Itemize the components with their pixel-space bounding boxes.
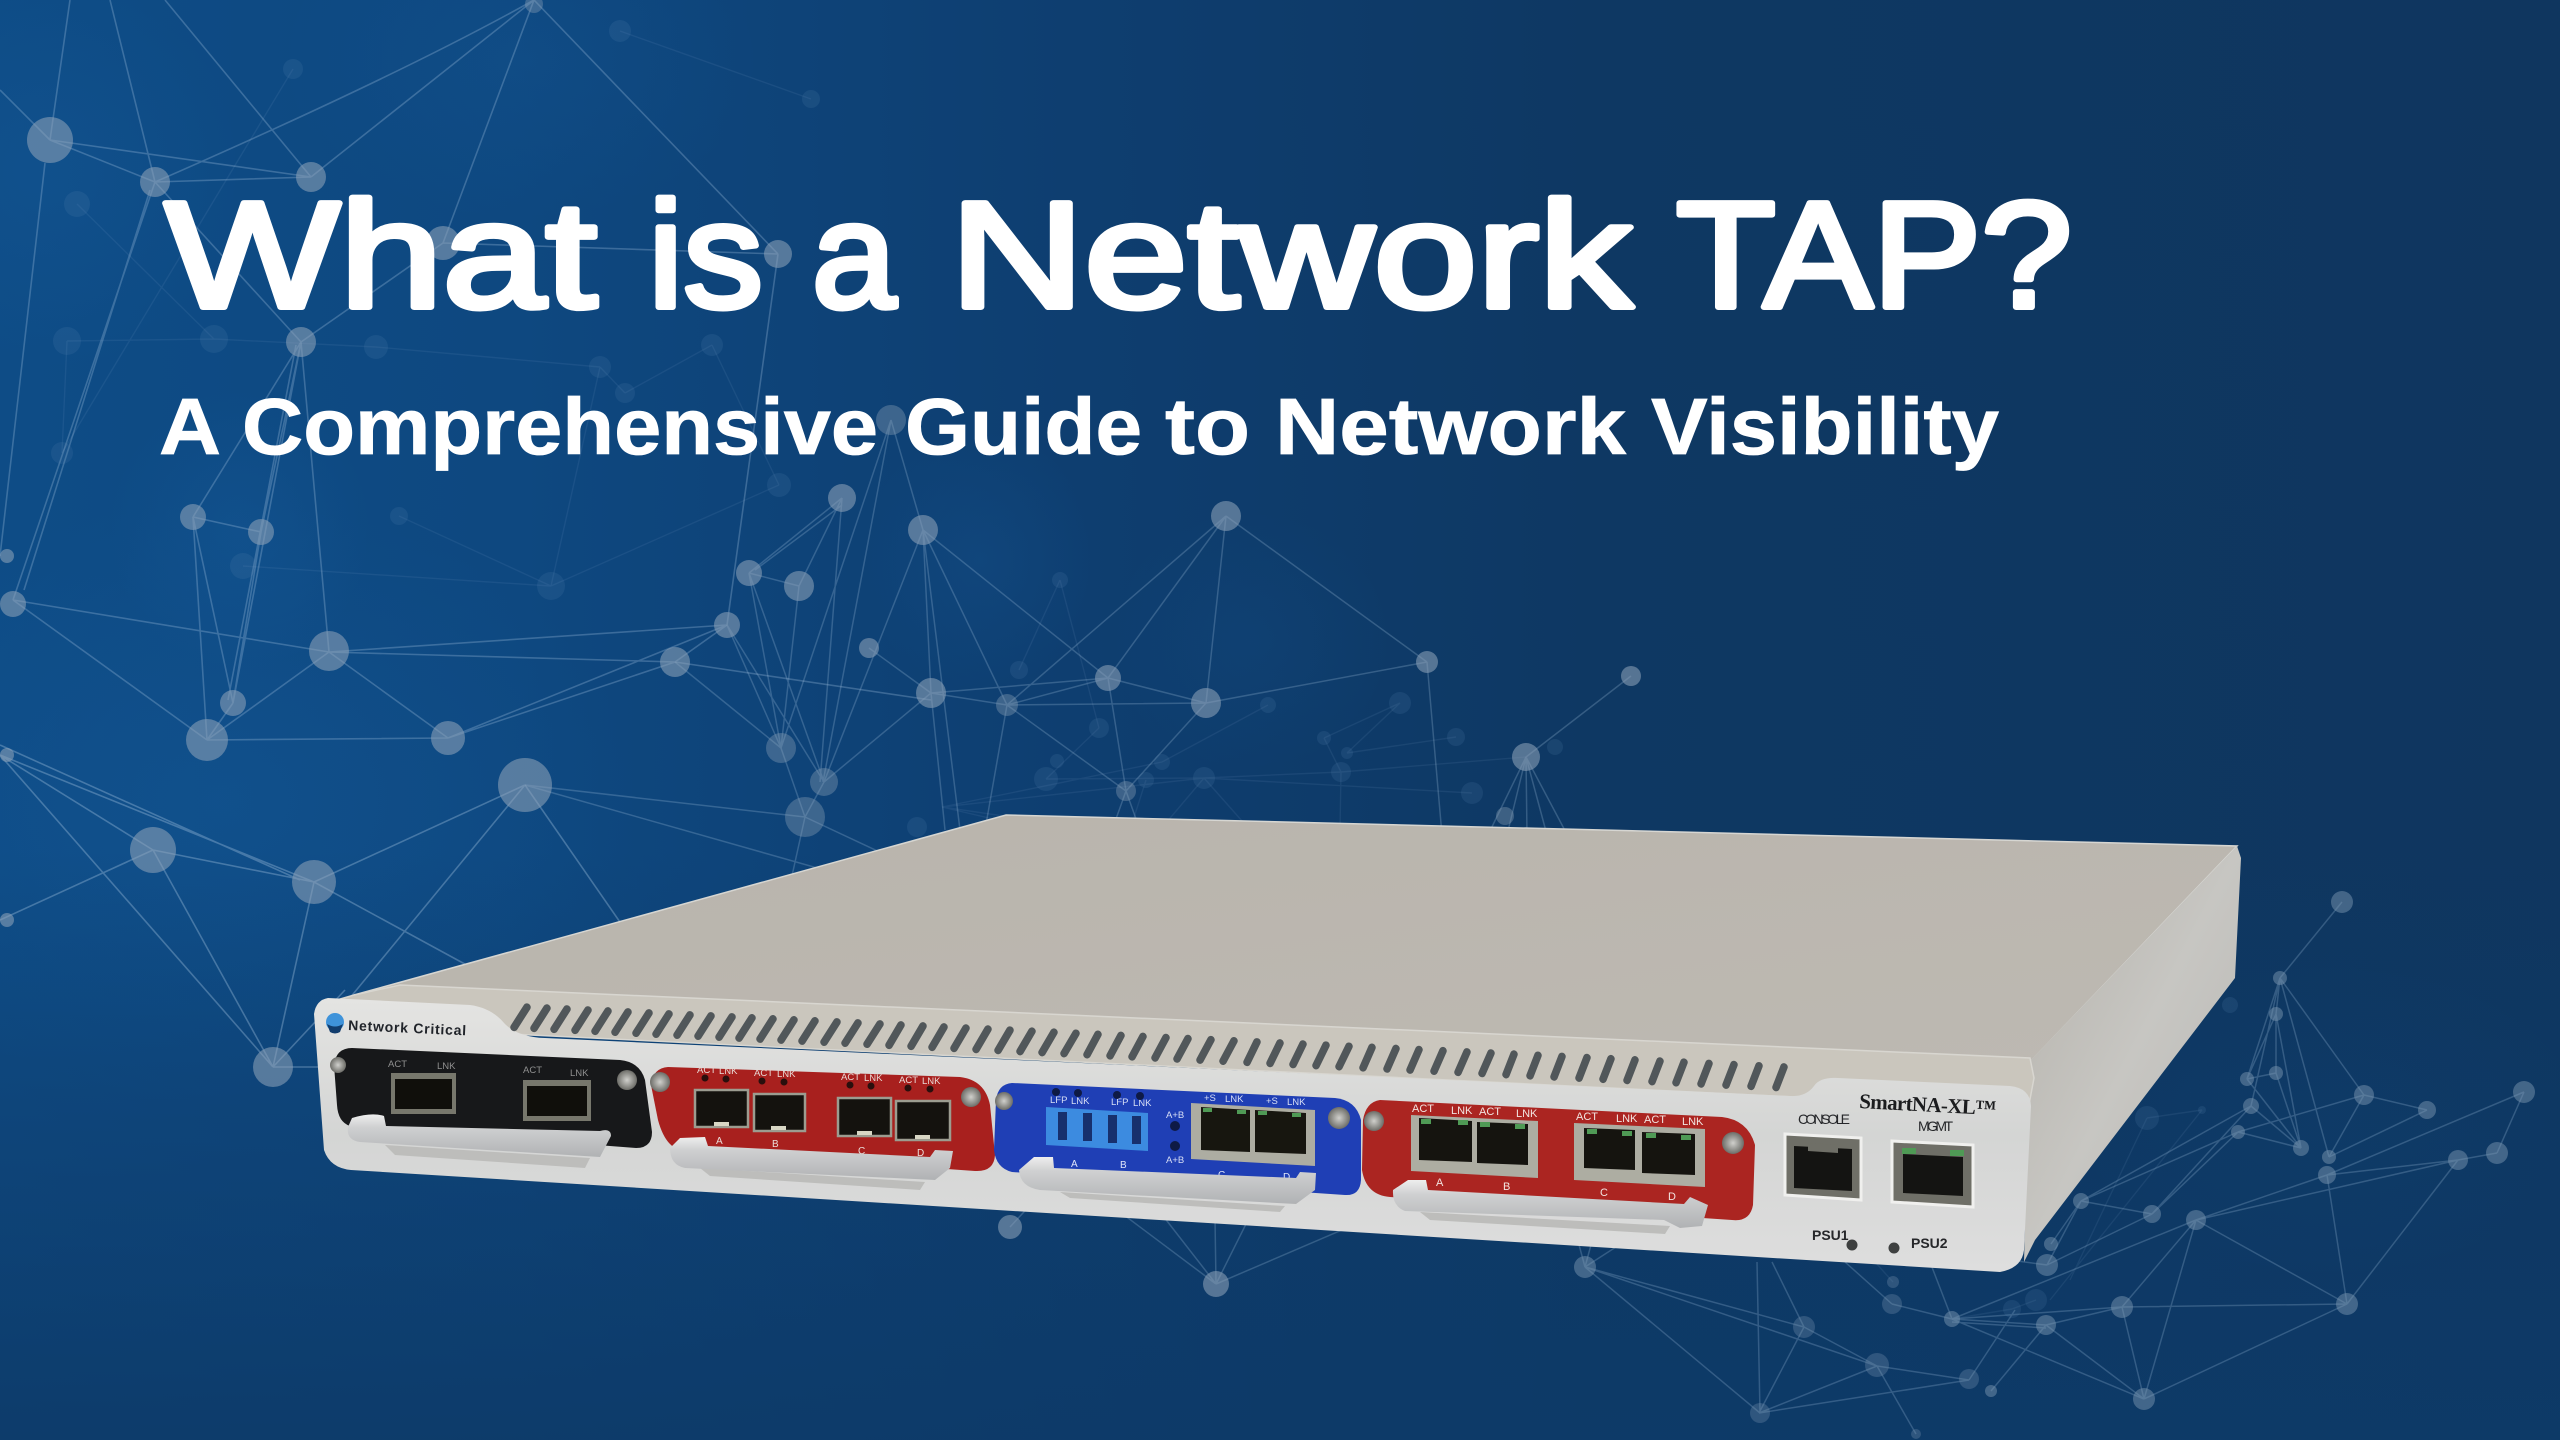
port labels <box>388 1059 589 1079</box>
brand label: Network Critical <box>348 1017 466 1038</box>
bright nodes, left side <box>0 117 1641 1297</box>
status labels: ACT <box>697 1065 716 1076</box>
lower and right lines <box>1010 902 2524 1434</box>
console and management ports <box>1785 1089 1997 1254</box>
port labels: LNK <box>1287 1097 1306 1108</box>
module letters: B <box>1503 1181 1510 1193</box>
subtitle: Comprehensive <box>242 382 878 471</box>
module letters: A <box>1436 1177 1444 1189</box>
port labels <box>1050 1093 1306 1166</box>
subtitle <box>159 382 2000 471</box>
power labels: PSU2 <box>1911 1235 1948 1251</box>
status labels: LNK <box>1616 1113 1638 1125</box>
handle <box>1393 1180 1708 1228</box>
status labels: ACT <box>1479 1106 1501 1118</box>
RJ45 port pair <box>1191 1103 1315 1166</box>
module letters <box>716 1136 924 1159</box>
network TAP device <box>314 815 2241 1272</box>
status labels: ACT <box>899 1075 918 1086</box>
SFP latches <box>714 1122 930 1139</box>
subtitle: Visibility <box>1651 382 2000 471</box>
device top face <box>354 815 2237 1062</box>
front panel <box>314 998 2031 1272</box>
LEDs <box>1052 1088 1180 1151</box>
module letters <box>1436 1177 1676 1203</box>
module letters: B <box>1120 1160 1127 1171</box>
module: blue <box>994 1083 1361 1212</box>
module letters: D <box>917 1148 924 1159</box>
port labels: LNK <box>437 1061 456 1072</box>
subtitle: Guide <box>905 382 1142 471</box>
module: red right <box>1362 1100 1755 1234</box>
status labels: LNK <box>1682 1116 1704 1128</box>
module: red left <box>650 1065 995 1190</box>
port labels: CONSOLE <box>1798 1111 1850 1127</box>
status labels: ACT <box>754 1068 773 1079</box>
handle <box>1019 1157 1316 1204</box>
module letters: A <box>1071 1159 1078 1170</box>
title: What <box>165 170 597 339</box>
port labels: A+B <box>1166 1110 1184 1121</box>
title: a <box>812 170 896 339</box>
port labels: LFP <box>1050 1095 1067 1106</box>
SFP port pair <box>391 1073 591 1121</box>
port labels: LNK <box>1225 1094 1244 1105</box>
module: black <box>330 1048 652 1168</box>
port labels: +S <box>1266 1096 1278 1107</box>
module letters <box>1071 1159 1290 1183</box>
faint connecting lines <box>62 31 2202 1319</box>
left and upper lines <box>0 0 931 740</box>
LEDs <box>702 1074 934 1092</box>
status labels: LNK <box>719 1066 738 1077</box>
status labels: ACT <box>1576 1111 1598 1123</box>
module letters: C <box>858 1146 865 1157</box>
status labels: ACT <box>1412 1103 1434 1115</box>
status labels <box>697 1065 941 1087</box>
port labels: LNK <box>1071 1096 1090 1107</box>
handle shadow <box>700 1168 925 1190</box>
LC connector block <box>1046 1107 1148 1151</box>
handle shadow <box>385 1145 590 1168</box>
SFP ports <box>695 1090 950 1140</box>
dim nodes, lower right <box>1750 1276 1979 1439</box>
vent slots <box>514 1006 1784 1088</box>
title: TAP? <box>1676 170 2072 339</box>
device side face <box>2024 846 2241 1262</box>
central lines <box>525 420 1631 930</box>
handle shadow <box>1060 1192 1285 1212</box>
handle <box>348 1114 611 1157</box>
console port <box>1785 1134 1861 1200</box>
power LEDs <box>1846 1240 1900 1254</box>
status labels: LNK <box>1516 1108 1538 1120</box>
module letters: B <box>772 1139 779 1150</box>
port labels: ACT <box>523 1065 542 1076</box>
lower-left lines <box>0 745 622 1067</box>
power labels <box>1812 1227 1948 1251</box>
module letters: C <box>1600 1187 1608 1199</box>
handle <box>670 1137 953 1180</box>
status labels: LNK <box>864 1073 883 1084</box>
subtitle: Network <box>1275 382 1627 471</box>
status labels: ACT <box>841 1072 860 1083</box>
port labels: A+B <box>1166 1155 1184 1166</box>
product name: SmartNA-XL™ <box>1859 1089 1997 1120</box>
port labels: LNK <box>570 1068 589 1079</box>
RJ45 port pair C D <box>1574 1123 1705 1187</box>
mid-brightness nodes <box>525 0 1514 837</box>
title: is <box>648 170 763 339</box>
title: Network <box>950 170 1633 339</box>
port labels <box>1798 1111 1953 1134</box>
vent strip <box>330 985 2034 1110</box>
title <box>165 170 2072 339</box>
subtitle: A <box>159 382 221 471</box>
module letters: C <box>1218 1170 1225 1181</box>
management port <box>1892 1141 1973 1207</box>
status labels <box>1412 1103 1704 1128</box>
logo mark <box>326 1013 344 1034</box>
port labels: LFP <box>1111 1097 1128 1108</box>
status labels: LNK <box>777 1069 796 1080</box>
port labels: ACT <box>388 1059 407 1070</box>
status labels: LNK <box>922 1076 941 1087</box>
module letters: A <box>716 1136 723 1147</box>
power labels: PSU1 <box>1812 1227 1849 1243</box>
module letters: D <box>1668 1191 1676 1203</box>
handle shadow <box>1420 1212 1670 1234</box>
port labels: MGMT <box>1918 1118 1953 1134</box>
faint nodes <box>51 20 2238 1318</box>
subtitle: to <box>1165 382 1250 471</box>
nodes, right side <box>1574 891 2535 1410</box>
module letters: D <box>1283 1172 1290 1183</box>
RJ45 port pair A B <box>1411 1115 1538 1178</box>
port labels: LNK <box>1133 1098 1152 1109</box>
status labels: ACT <box>1644 1114 1666 1126</box>
status labels: LNK <box>1451 1105 1473 1117</box>
port labels: +S <box>1204 1093 1216 1104</box>
